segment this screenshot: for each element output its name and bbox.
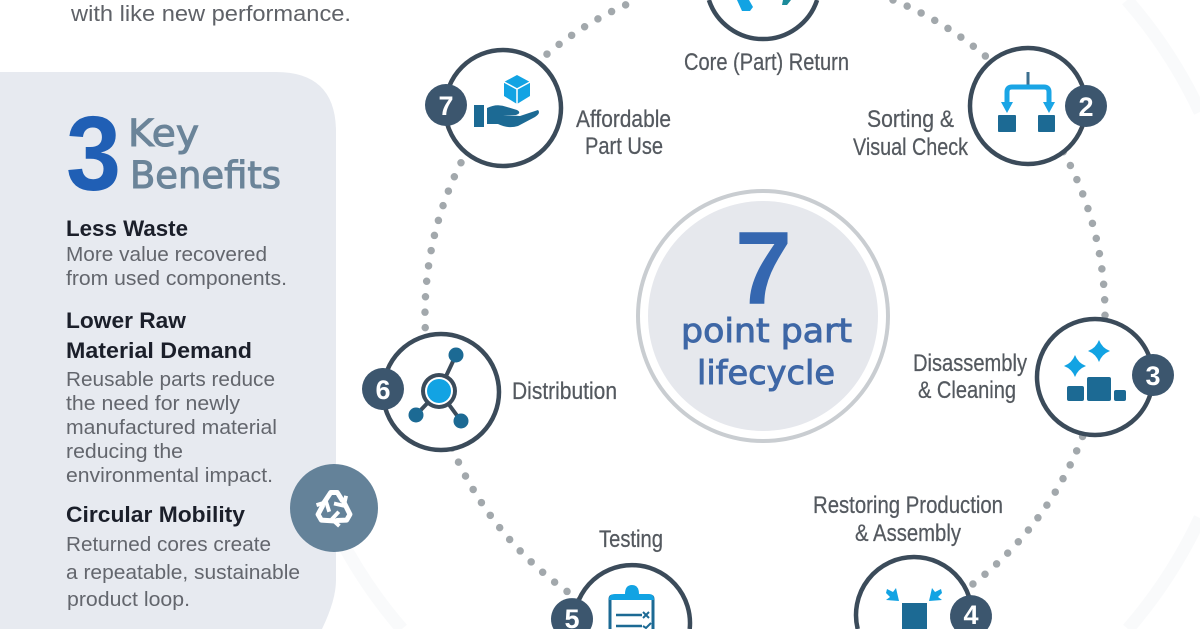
heading: 3 key benefits: Key	[128, 112, 199, 155]
benefit: lower raw material demand	[66, 308, 277, 487]
benefit: lower raw material demand: manufactured material	[66, 416, 277, 439]
step 6: distribution: 6	[375, 375, 391, 405]
heading: 3 key benefits	[66, 95, 281, 213]
step 1: core (part) return: Core (Part) Return	[684, 49, 849, 76]
step 5: testing: Testing	[599, 526, 663, 553]
icon: distribution hub	[408, 348, 468, 428]
benefit: lower raw material demand: Reusable parts reduce	[66, 368, 275, 391]
icon: hand holding box	[474, 75, 539, 127]
icon: assembly	[886, 588, 942, 629]
benefit: circular mobility: a repeatable, sustainable	[66, 561, 300, 584]
step 7: affordable part use: Part Use	[585, 133, 663, 160]
intro text: with like new performance.	[70, 1, 351, 26]
benefit: circular mobility: Returned cores create	[66, 533, 271, 556]
benefit: less waste: from used components.	[66, 267, 287, 290]
step 2: sorting and visual check	[853, 48, 1107, 164]
step 1: core (part) return	[684, 0, 849, 76]
centre badge: 7 point part lifecycle: 7	[735, 211, 792, 327]
benefit: lower raw material demand: Material Demand	[66, 338, 252, 363]
step 7: affordable part use: Affordable	[576, 106, 671, 133]
benefit: lower raw material demand: reducing the	[66, 440, 183, 463]
dotted lifecycle ring	[425, 0, 1105, 629]
benefit: circular mobility	[66, 502, 300, 611]
benefit: less waste	[66, 216, 287, 290]
step 2: sorting and visual check: Sorting &	[867, 106, 954, 133]
step 7: affordable part use: 7	[438, 91, 454, 121]
benefit: lower raw material demand: Lower Raw	[66, 308, 187, 333]
step 4: restoring production and assembly	[813, 492, 1003, 629]
step 4: restoring production and assembly: Restoring Production	[813, 492, 1003, 519]
step 3: disassembly and cleaning: 3	[1145, 361, 1161, 391]
benefit: less waste: Less Waste	[66, 216, 188, 241]
centre badge: 7 point part lifecycle	[638, 191, 888, 441]
step 3: disassembly and cleaning	[913, 319, 1174, 435]
step 6: distribution	[362, 334, 617, 450]
benefit: less waste: More value recovered	[66, 243, 267, 266]
step 5: testing	[551, 526, 690, 629]
heading: 3 key benefits: 3	[66, 95, 121, 213]
step 3: disassembly and cleaning: Disassembly	[913, 350, 1027, 377]
step 6: distribution: Distribution	[512, 378, 617, 405]
benefit: lower raw material demand: environmental impact.	[66, 464, 273, 487]
icon: sorting arrows	[998, 72, 1055, 132]
step 4: restoring production and assembly: & Assembly	[855, 520, 961, 547]
benefit: lower raw material demand: the need for newly	[66, 392, 241, 415]
icon: recycle badge	[290, 464, 378, 552]
step 2: sorting and visual check: Visual Check	[853, 134, 969, 161]
benefit: circular mobility: product loop.	[67, 588, 190, 611]
icon: clipboard	[609, 585, 654, 629]
benefit: circular mobility: Circular Mobility	[66, 502, 246, 527]
step 7: affordable part use	[425, 50, 671, 166]
heading: 3 key benefits: Benefits	[130, 154, 281, 197]
panel: key benefits	[0, 72, 336, 629]
centre badge: 7 point part lifecycle: lifecycle	[697, 353, 835, 392]
step 3: disassembly and cleaning: & Cleaning	[918, 377, 1016, 404]
step 2: sorting and visual check: 2	[1078, 92, 1094, 122]
centre badge: 7 point part lifecycle: point part	[681, 311, 852, 350]
icon: sparkling parts	[1064, 340, 1126, 401]
